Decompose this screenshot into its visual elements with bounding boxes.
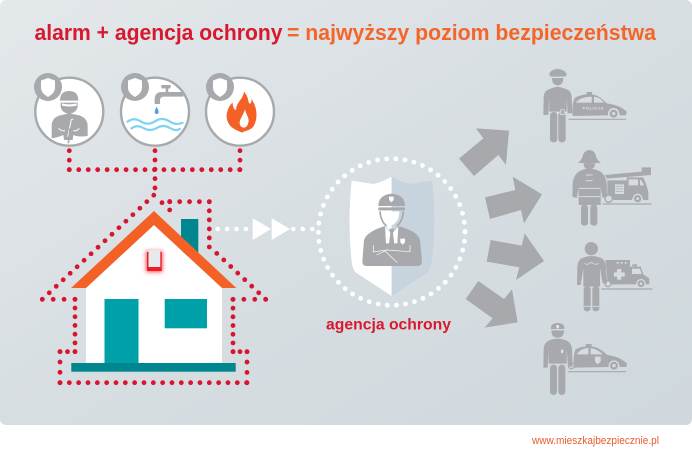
red dotted connectors between threat icons and house xyxy=(69,151,240,188)
door xyxy=(104,299,138,363)
arrow to security patrol xyxy=(466,281,518,328)
arrow to ambulance xyxy=(487,233,544,280)
roof xyxy=(71,211,236,288)
arrow to fire brigade xyxy=(485,177,542,223)
arrow to police xyxy=(459,128,509,176)
icon: fire threat xyxy=(206,78,274,146)
house protection perimeter dotted line xyxy=(42,195,266,383)
house body xyxy=(86,225,222,363)
window xyxy=(165,299,207,328)
security agency shield with guard xyxy=(349,177,434,296)
chimney xyxy=(181,219,198,256)
icon: burglar threat xyxy=(35,78,103,146)
label: security agency: agencja ochrony xyxy=(326,316,451,334)
white dotted signal with arrows xyxy=(218,218,312,240)
house xyxy=(71,211,236,372)
title: alarm + agencja ochrony xyxy=(34,20,283,45)
police officer with car: POLICJA xyxy=(583,106,603,111)
foundation xyxy=(71,363,236,372)
website url: www.mieszkajbezpiecznie.pl xyxy=(531,435,659,447)
shield xyxy=(349,177,434,296)
arrows to emergency services xyxy=(459,128,544,328)
icon: shield badges xyxy=(34,73,234,101)
security guard with patrol car xyxy=(543,323,627,395)
title xyxy=(34,20,657,45)
guard xyxy=(362,194,422,266)
paramedic with ambulance xyxy=(577,242,652,311)
dotted ring around security agency xyxy=(318,159,465,305)
icon: water leak threat xyxy=(121,78,189,146)
firefighter with fire truck xyxy=(572,150,651,226)
alarm sensor xyxy=(146,250,162,272)
title: = najwyższy poziom bezpieczeństwa xyxy=(287,20,657,45)
police officer with car xyxy=(543,69,627,142)
